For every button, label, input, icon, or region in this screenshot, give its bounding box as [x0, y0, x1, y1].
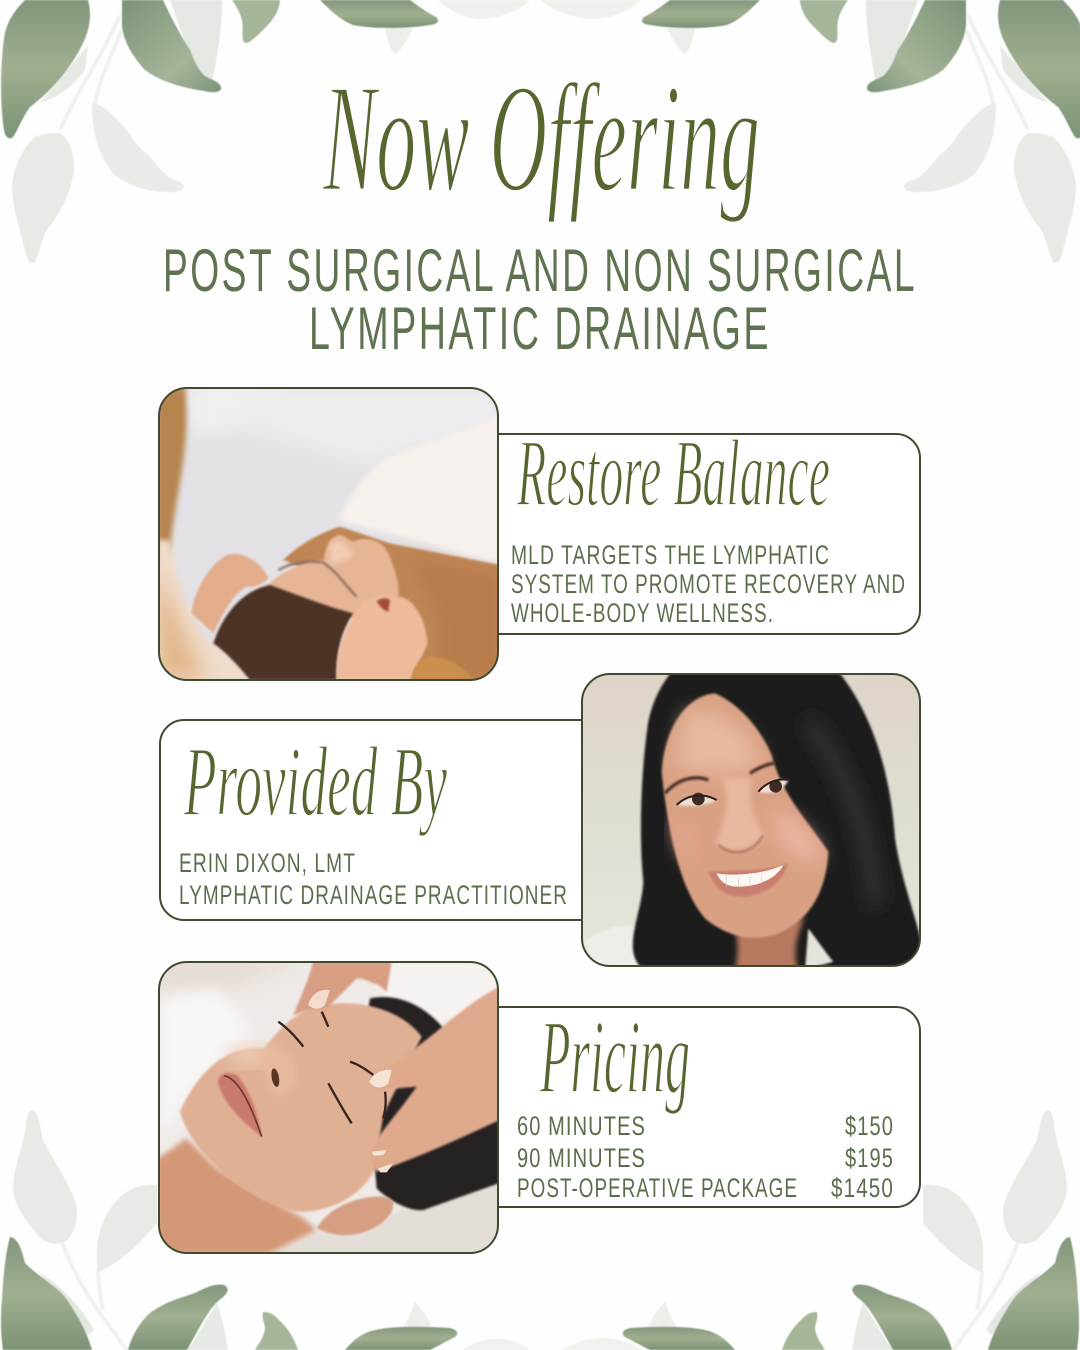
price list: 90 MINUTES	[517, 1143, 646, 1173]
description text: SYSTEM TO PROMOTE RECOVERY AND	[511, 569, 906, 599]
leaves: top right corner	[866, 0, 1080, 263]
leaves: top left corner	[1, 0, 222, 263]
price list: 60 MINUTES	[517, 1111, 646, 1141]
price list: $195	[845, 1143, 894, 1173]
main heading: LYMPHATIC DRAINAGE	[309, 295, 771, 362]
practitioner text: LYMPHATIC DRAINAGE PRACTITIONER	[179, 880, 568, 910]
panel: pricing	[150, 955, 920, 1265]
description text: WHOLE-BODY WELLNESS.	[511, 598, 774, 628]
photo: massage with hands at temples	[158, 387, 499, 681]
price list: $150	[845, 1111, 894, 1141]
leaves: top edge right	[642, 0, 848, 54]
leaves: top edge left	[232, 0, 642, 54]
price list: $1450	[831, 1173, 894, 1203]
panel: provided by	[160, 665, 932, 975]
description text: MLD TARGETS THE LYMPHATIC	[511, 540, 830, 570]
price list	[517, 1111, 894, 1203]
card outline	[440, 1007, 920, 1207]
panel: restore balance	[150, 380, 920, 690]
price list: POST-OPERATIVE PACKAGE	[517, 1173, 798, 1203]
script heading: provided by: Provided By	[183, 726, 447, 837]
practitioner text: ERIN DIXON, LMT	[179, 848, 356, 878]
photo: facial lymphatic massage	[158, 961, 499, 1254]
card outline	[160, 720, 640, 920]
card outline	[440, 434, 920, 634]
leaves: bottom left corner	[1, 1110, 642, 1350]
panel: pricing: Pricing	[540, 998, 690, 1115]
photo: portrait of practitioner	[575, 665, 932, 975]
practitioner text	[179, 848, 568, 910]
description text	[511, 540, 906, 628]
main heading	[163, 237, 917, 362]
leaves: bottom right corner	[623, 1110, 1079, 1350]
